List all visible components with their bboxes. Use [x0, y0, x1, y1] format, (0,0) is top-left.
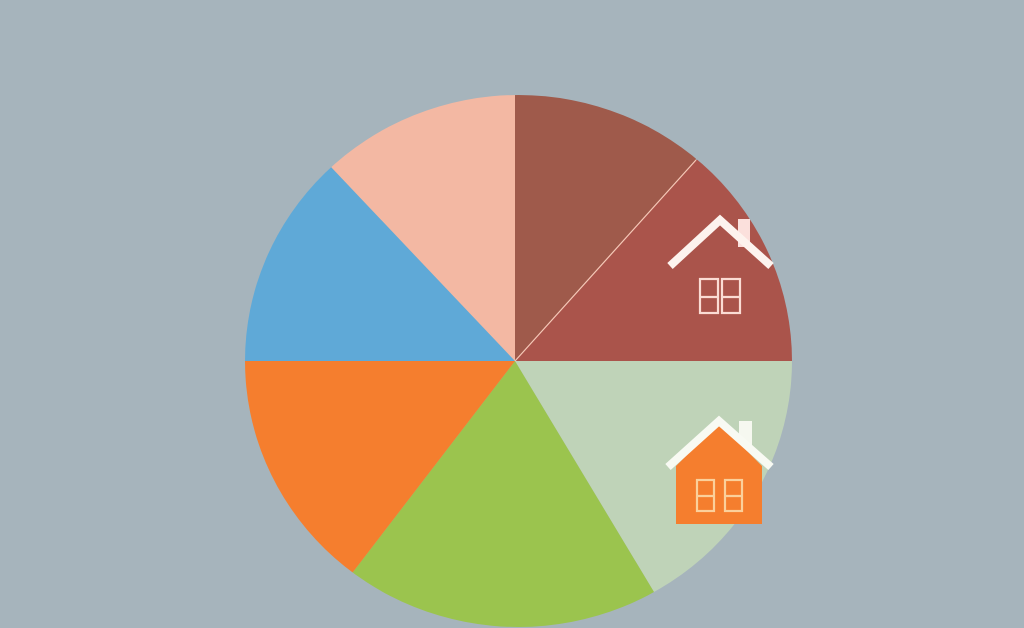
slice: orange	[245, 361, 515, 572]
slice: peach	[331, 95, 515, 361]
chimney	[739, 421, 752, 451]
roof	[668, 421, 771, 467]
divider line between the two red slices	[515, 160, 696, 361]
icon: outlined house	[670, 219, 771, 313]
icon: orange house	[668, 421, 771, 524]
windows	[697, 480, 742, 511]
slice: red-brown	[516, 160, 792, 361]
slice: blue	[245, 167, 515, 361]
slice: green	[352, 361, 654, 627]
roof	[670, 220, 771, 266]
pie chart	[245, 95, 792, 627]
house body	[676, 423, 762, 524]
windows	[700, 279, 740, 313]
slice: dark brown	[515, 95, 696, 360]
slice: pale green	[515, 361, 792, 592]
chimney	[738, 219, 750, 247]
